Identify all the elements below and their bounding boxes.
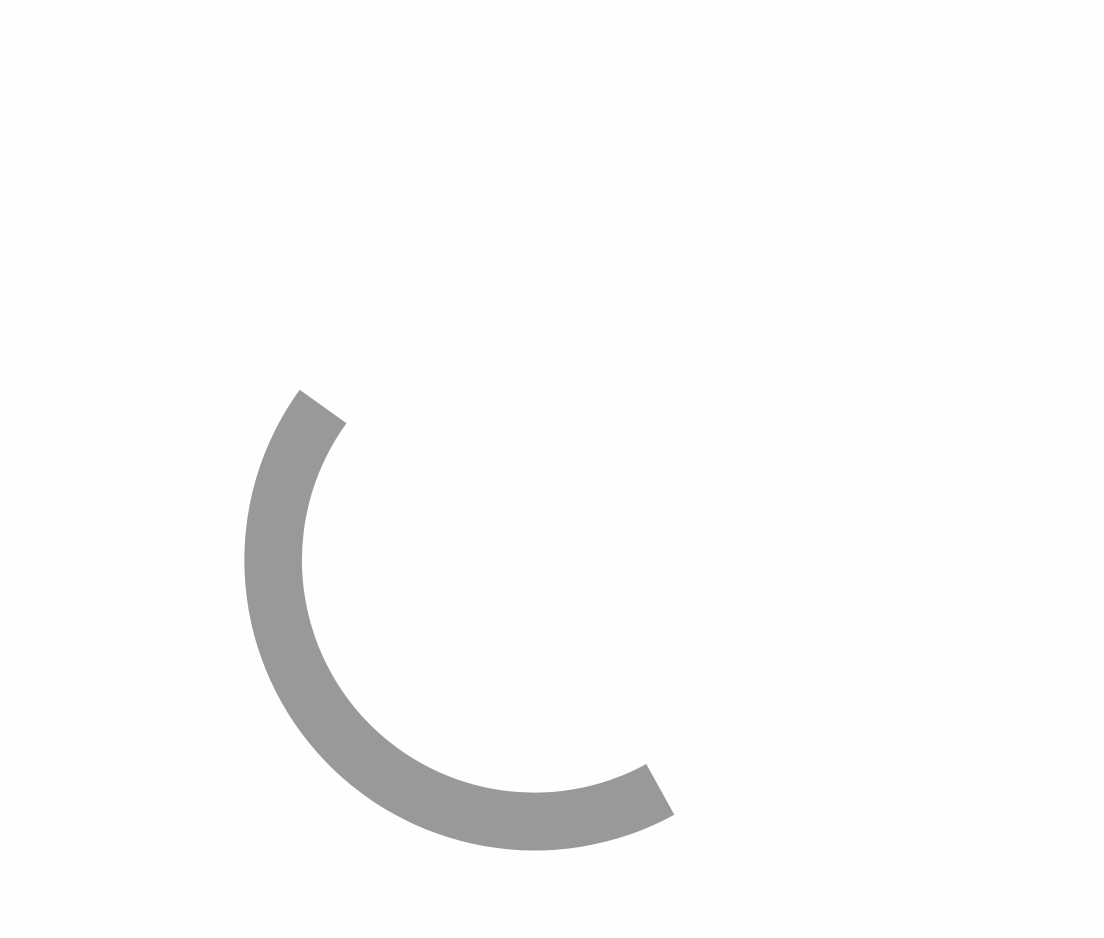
chart: grey arc segment — [244, 390, 674, 850]
